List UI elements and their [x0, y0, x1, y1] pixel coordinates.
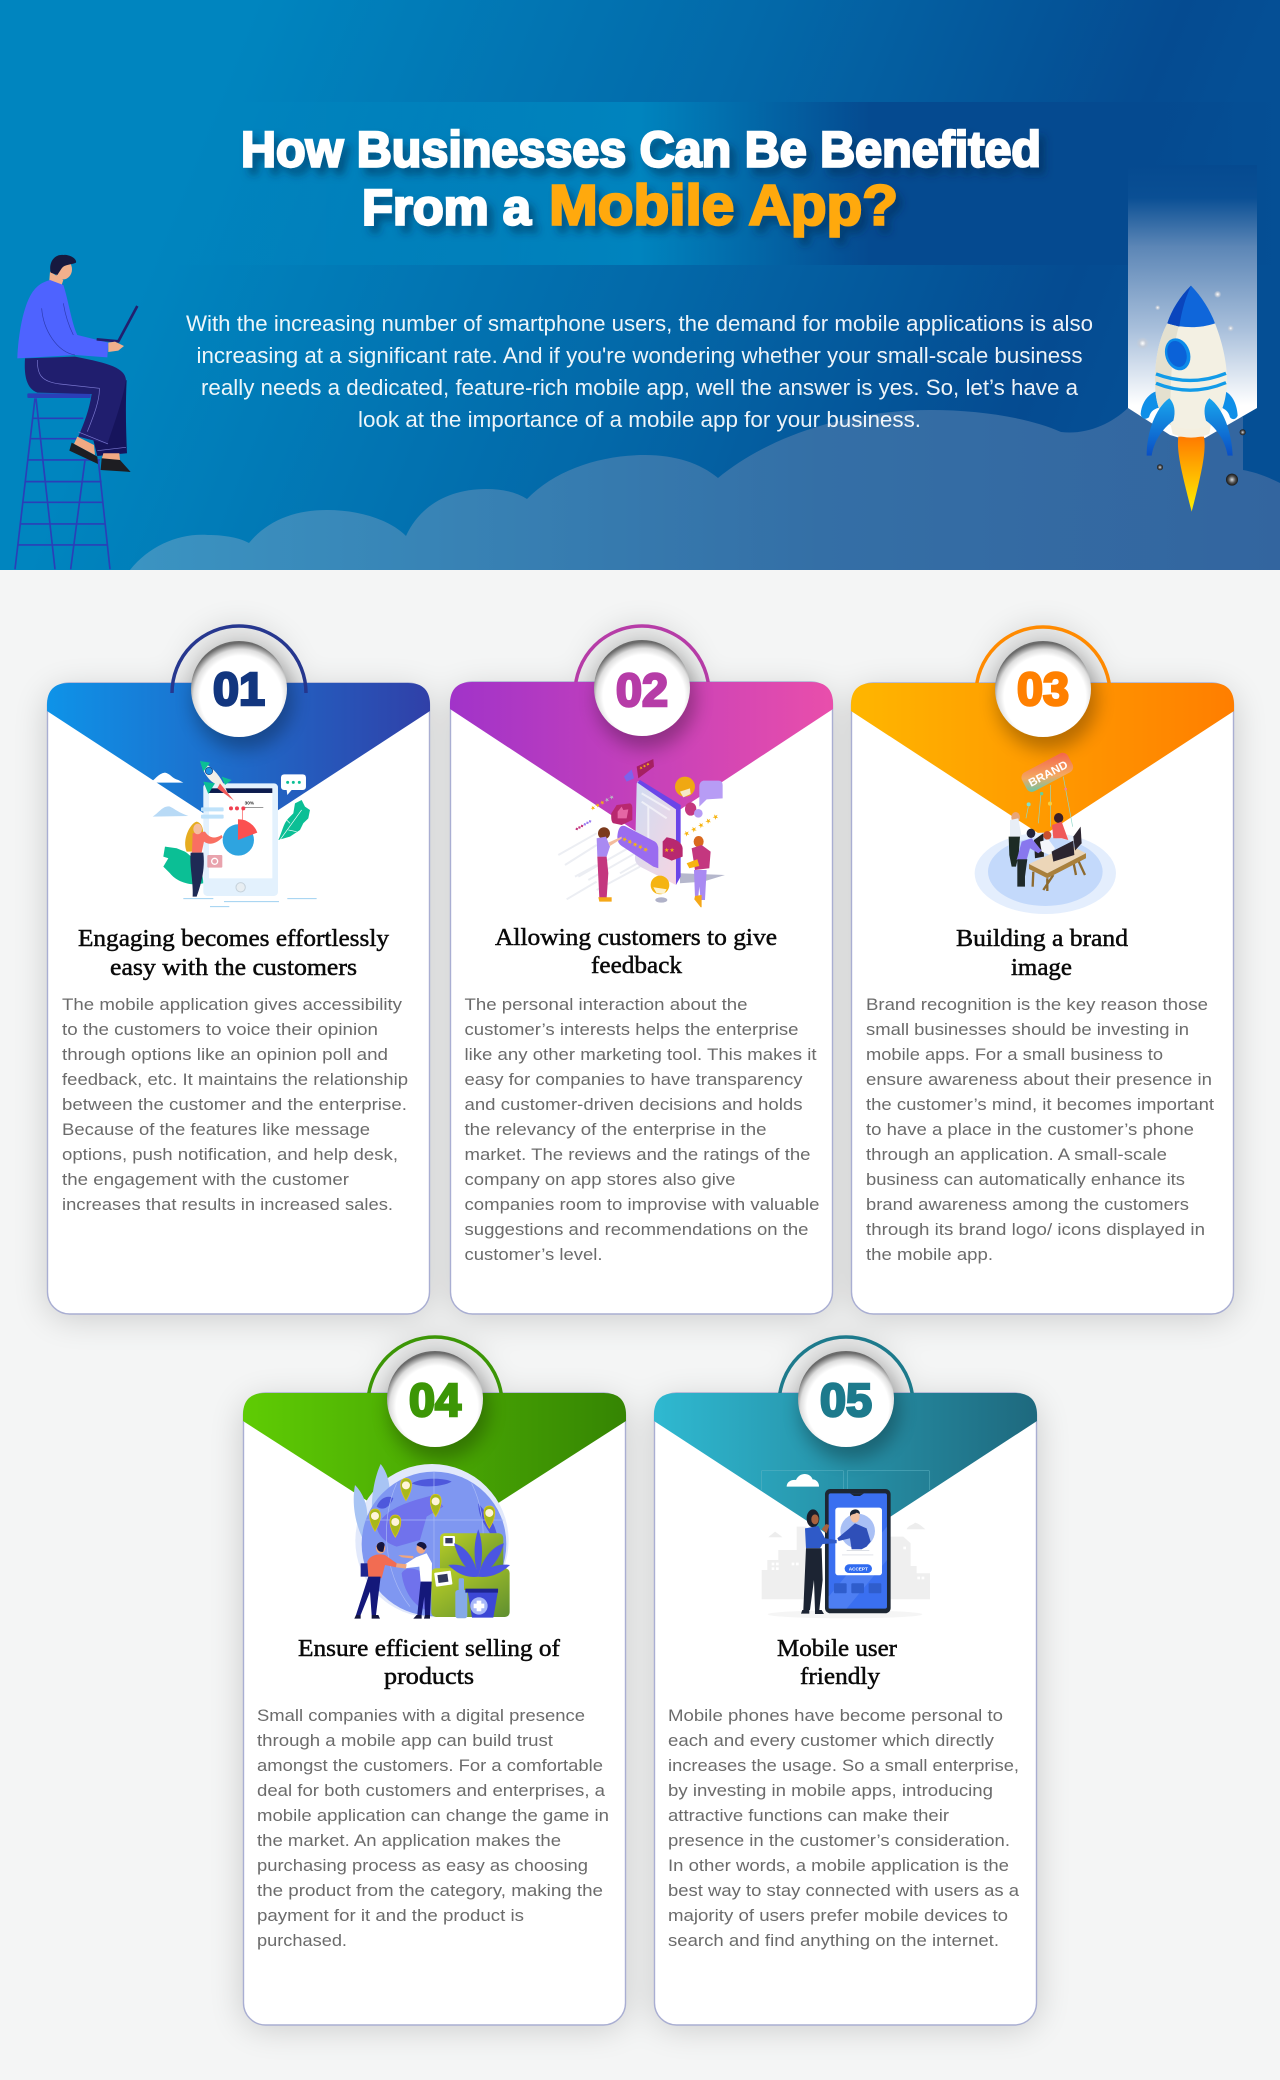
badge 03: 03: [1017, 663, 1069, 715]
heading 03: Building a brand: [956, 926, 1128, 952]
body text 03: small businesses should be investing in: [866, 1020, 1189, 1039]
body text 01: the engagement with the customer: [62, 1170, 349, 1189]
illustration: customer feedback phone: ★★★★★: [681, 811, 721, 839]
body text 04: payment for it and the product is: [257, 1906, 524, 1925]
body text 04: purchasing process as easy as choosing: [257, 1856, 588, 1875]
heading 02: Allowing customers to give: [495, 925, 777, 951]
body text 02: companies room to improvise with valuable: [464, 1195, 820, 1214]
body text 01: Because of the features like message: [62, 1120, 370, 1139]
illustration: customer feedback phone: ◆◆◆◆◆◆: [574, 818, 593, 832]
heading 05: friendly: [800, 1664, 880, 1690]
body text 03: through an application. A small-scale: [866, 1145, 1167, 1164]
hero banner: [0, 0, 1280, 570]
panel: card 02: [450, 626, 833, 1314]
heading 01: easy with the customers: [110, 955, 357, 981]
heading 05: Mobile user: [777, 1636, 897, 1662]
panel: card 01: [47, 626, 430, 1314]
badge 03: [851, 627, 1234, 836]
body text 01: The mobile application gives accessibility: [62, 995, 403, 1014]
body text 03: Brand recognition is the key reason those: [866, 995, 1208, 1014]
body text 02: customer’s interests helps the enterprise: [464, 1020, 798, 1039]
body text 02: easy for companies to have transparency: [464, 1070, 803, 1089]
body text 05: In other words, a mobile application is the: [668, 1856, 1009, 1875]
illustration: brand team at desk: [975, 751, 1116, 914]
heading 03: [956, 926, 1128, 981]
badge 04: [243, 1337, 626, 1544]
body text 03: [866, 995, 1214, 1264]
intro paragraph: increasing at a significant rate. And if you're wondering whether your small-scale business: [196, 343, 1082, 368]
body text 03: brand awareness among the customers: [866, 1195, 1189, 1214]
heading 03: image: [1011, 955, 1072, 981]
illustration: customer feedback phone: ★★★: [638, 761, 651, 771]
body text 02: [464, 995, 820, 1264]
badge 02: 02: [616, 664, 668, 716]
illustration: tablet analytics: [150, 761, 317, 907]
body text 03: the customer’s mind, it becomes important: [866, 1095, 1214, 1114]
body text 01: [62, 995, 408, 1214]
title: [241, 122, 1041, 238]
body text 02: market. The reviews and the ratings of the: [464, 1145, 810, 1164]
illustration: global trade handshake: [354, 1464, 510, 1619]
title: How Businesses Can Be Benefited: [241, 122, 1041, 178]
heading 04: products: [384, 1664, 474, 1690]
body text 02: The personal interaction about the: [464, 995, 748, 1014]
body text 05: search and find anything on the internet.: [668, 1931, 999, 1950]
body text 03: through its brand logo/ icons displayed in: [866, 1220, 1205, 1239]
body text 04: Small companies with a digital presence: [257, 1706, 585, 1725]
cloud silhouette: [130, 408, 1280, 570]
body text 05: presence in the customer’s consideration.: [668, 1831, 1010, 1850]
body text 04: through a mobile app can build trust: [257, 1731, 553, 1750]
panel: card 04: [243, 1337, 626, 2025]
body text 05: majority of users prefer mobile devices to: [668, 1906, 1008, 1925]
panel: card 05: [654, 1337, 1037, 2025]
body text 01: feedback, etc. It maintains the relationship: [62, 1070, 408, 1089]
illustration: rocket: [1128, 165, 1257, 512]
body text 05: by investing in mobile apps, introducing: [668, 1781, 993, 1800]
badge 02: [450, 626, 833, 835]
illustration: mobile friendly phone: [762, 1471, 930, 1618]
heading 02: [495, 925, 777, 979]
body text 02: and customer-driven decisions and holds: [464, 1095, 802, 1114]
illustration: brand team at desk: BRAND: [1027, 759, 1070, 790]
illustration: customer feedback phone: ★★★★★: [589, 793, 616, 813]
heading 04: [298, 1636, 560, 1690]
illustration: customer feedback phone: ★★: [664, 847, 675, 854]
body text 05: attractive functions can make their: [668, 1806, 949, 1825]
body text 02: suggestions and recommendations on the: [464, 1220, 808, 1239]
body text 01: between the customer and the enterprise.: [62, 1095, 407, 1114]
illustration: man with laptop on ladder: [15, 255, 137, 569]
body text 04: the product from the category, making the: [257, 1881, 603, 1900]
rocket light beam panel: [1128, 165, 1257, 438]
body text 05: Mobile phones have become personal to: [668, 1706, 1003, 1725]
body text 04: purchased.: [257, 1931, 347, 1950]
title: From a: [362, 180, 532, 236]
body text 02: company on app stores also give: [464, 1170, 736, 1189]
illustration: tablet analytics: 30%: [245, 801, 255, 806]
heading 01: Engaging becomes effortlessly: [78, 926, 389, 952]
badge 05: 05: [820, 1374, 872, 1426]
body text 04: mobile application can change the game in: [257, 1806, 609, 1825]
body text 01: increases that results in increased sales.: [62, 1195, 393, 1214]
title: Mobile App?: [549, 174, 898, 238]
illustration: customer feedback phone: [558, 759, 725, 907]
body text 04: amongst the customers. For a comfortable: [257, 1756, 603, 1775]
heading 02: feedback: [591, 953, 682, 979]
badge 04: 04: [409, 1374, 461, 1426]
body text 05: best way to stay connected with users as a: [668, 1881, 1020, 1900]
panel: card 03: [851, 627, 1234, 1314]
heading 05: [777, 1636, 897, 1690]
intro paragraph: look at the importance of a mobile app for your business.: [358, 407, 921, 432]
body text 01: options, push notification, and help desk,: [62, 1145, 398, 1164]
badge 01: 01: [213, 663, 265, 715]
intro paragraph: [186, 311, 1093, 432]
body text 01: through options like an opinion poll and: [62, 1045, 388, 1064]
body text 03: mobile apps. For a small business to: [866, 1045, 1163, 1064]
heading 01: [78, 926, 389, 981]
body text 05: increases the usage. So a small enterprise,: [668, 1756, 1019, 1775]
body text 02: the relevancy of the enterprise in the: [464, 1120, 766, 1139]
body text 05: each and every customer which directly: [668, 1731, 995, 1750]
heading 04: Ensure efficient selling of: [298, 1636, 560, 1662]
body text 03: ensure awareness about their presence in: [866, 1070, 1212, 1089]
badge 05: [654, 1337, 1037, 1546]
intro paragraph: With the increasing number of smartphone users, the demand for mobile applications is also: [186, 311, 1093, 336]
body text 02: like any other marketing tool. This makes it: [464, 1045, 817, 1064]
body text 04: the market. An application makes the: [257, 1831, 561, 1850]
intro paragraph: really needs a dedicated, feature-rich mobile app, well the answer is yes. So, let’s have a: [201, 375, 1078, 400]
body text 04: [257, 1706, 609, 1950]
body text 03: the mobile app.: [866, 1245, 993, 1264]
badge 01: [172, 626, 306, 750]
illustration: mobile friendly phone: ACCEPT: [849, 1566, 868, 1571]
body text 03: business can automatically enhance its: [866, 1170, 1185, 1189]
body text 05: [668, 1706, 1020, 1950]
illustration: customer feedback phone: ★★★★★: [620, 835, 650, 855]
body text 02: customer’s level.: [464, 1245, 602, 1264]
body text 01: to the customers to voice their opinion: [62, 1020, 378, 1039]
body text 03: to have a place in the customer’s phone: [866, 1120, 1194, 1139]
body text 04: deal for both customers and enterprises, a: [257, 1781, 606, 1800]
